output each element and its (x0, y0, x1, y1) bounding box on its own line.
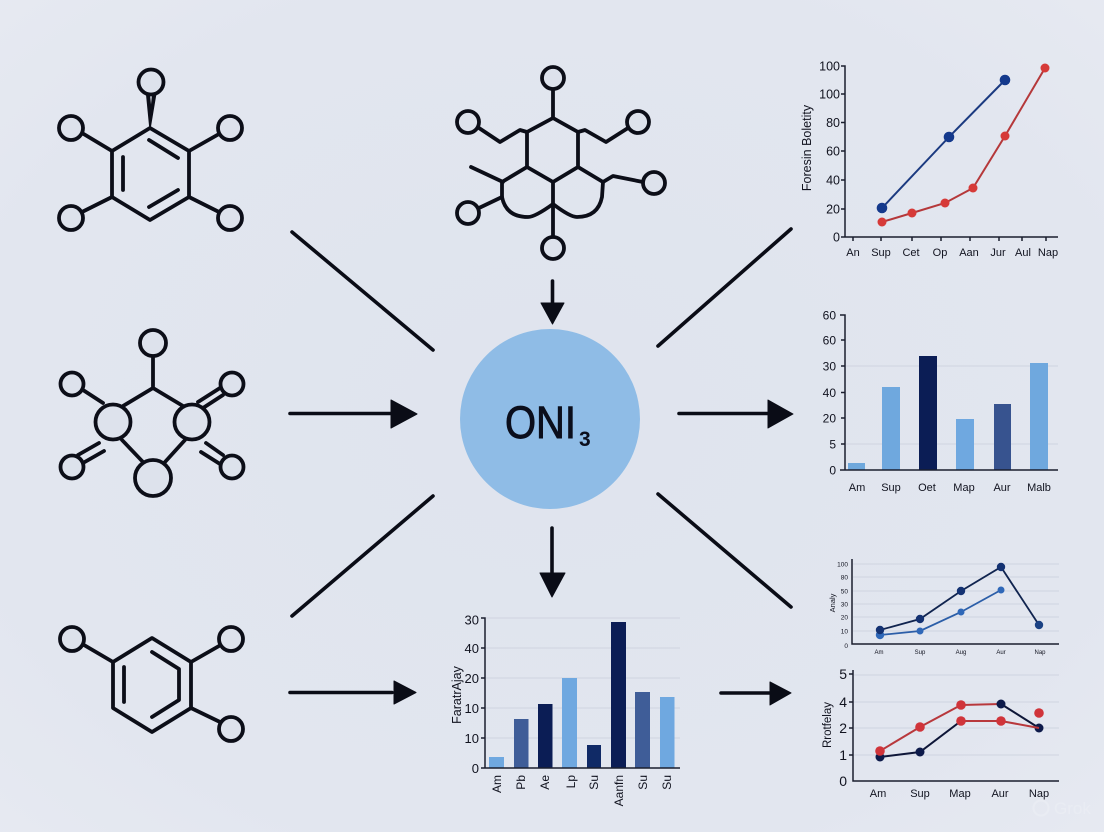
light blue series (876, 586, 1004, 639)
y axis labels: 40 (823, 386, 836, 400)
y axis labels: 40 (465, 641, 479, 656)
y axis labels: 30 (465, 612, 479, 628)
red series (878, 64, 1050, 226)
y axis labels: 50 (841, 588, 848, 596)
y axis labels: 10 (465, 701, 479, 716)
y axis labels: 20 (823, 412, 836, 426)
x axis labels: Am (874, 650, 884, 656)
y axis title: Foresin Boletity (800, 104, 814, 191)
bars (848, 356, 1048, 470)
line: upper left diagonal (292, 232, 433, 350)
x axis labels: Cet (902, 247, 920, 259)
x axis labels (874, 650, 1046, 656)
y axis labels: 30 (823, 360, 836, 374)
watermark (1034, 799, 1091, 818)
x axis labels (870, 788, 1049, 800)
x axis labels: Op (933, 247, 947, 259)
line chart: lower right upper panel (828, 559, 1059, 656)
arrow: bar chart to lower right charts (721, 682, 791, 705)
bar chart: middle right (823, 308, 1058, 494)
central label: 3 (579, 428, 591, 451)
x axis labels: Nap (1038, 247, 1058, 259)
x axis labels: Lp (564, 775, 578, 788)
x axis labels: Su (587, 775, 601, 790)
x axis labels: Aanfn (612, 775, 626, 806)
y axis labels (837, 562, 848, 650)
y axis labels: 40 (826, 174, 840, 188)
x axis labels (849, 482, 1051, 494)
x axis labels: Aan (959, 247, 979, 259)
y axis labels: 4 (839, 694, 847, 710)
arrow: centre down to bar chart (540, 528, 565, 597)
central circle node (460, 329, 640, 509)
x axis labels: Sup (881, 482, 901, 494)
dark blue series (876, 563, 1043, 634)
x axis labels: Am (849, 482, 865, 494)
x axis labels: Am (870, 788, 886, 800)
y axis labels: 100 (819, 60, 840, 74)
y axis labels: 0 (844, 643, 848, 650)
y axis labels: 100 (819, 88, 840, 102)
molecule: top centre, fused rings (457, 67, 665, 259)
y axis labels: 80 (841, 574, 848, 582)
y axis labels: 20 (465, 671, 479, 686)
x axis labels: Map (949, 788, 971, 800)
x axis labels: Sup (910, 788, 930, 800)
x axis labels: Su (660, 775, 674, 790)
bar chart: bottom centre (450, 612, 680, 806)
y axis title: FaratrAjay (450, 665, 464, 724)
y axis title: Analy (828, 593, 837, 612)
y axis labels: 20 (841, 614, 848, 622)
y axis labels: 5 (839, 666, 847, 682)
x axis labels: Map (953, 482, 975, 494)
blue series (877, 75, 1010, 213)
molecule: top left, six-ring with five substituents (59, 70, 242, 230)
y axis labels: 60 (823, 334, 836, 348)
x axis labels: Nap (1029, 788, 1049, 800)
y axis labels: 10 (465, 731, 479, 746)
arrow: centre to right bar chart (679, 400, 793, 428)
x axis labels: Malb (1027, 482, 1051, 494)
line: lower left diagonal (292, 496, 433, 616)
y axis labels (465, 612, 479, 776)
x axis labels: Nap (1034, 650, 1046, 656)
y axis labels: 1 (839, 747, 847, 763)
y axis labels: 0 (833, 230, 840, 244)
y axis labels: 5 (829, 438, 836, 452)
y axis labels (823, 308, 836, 478)
x axis labels: Sup (871, 247, 891, 259)
arrow: middle left to centre (290, 400, 417, 428)
x axis labels: Aul (1015, 247, 1031, 259)
x axis labels (846, 247, 1058, 259)
dark series (876, 704, 1044, 762)
line: upper right diagonal (658, 229, 791, 346)
y axis labels: 0 (839, 773, 847, 789)
line: lower right diagonal (658, 494, 791, 607)
molecule: middle left, circles linked by bonds (60, 330, 244, 496)
y axis labels: 80 (826, 116, 840, 130)
x axis labels: Aur (991, 788, 1009, 800)
x axis labels: Sup (915, 650, 926, 656)
x axis labels: Su (636, 775, 650, 790)
x axis labels: An (846, 247, 860, 259)
y axis labels: 0 (472, 761, 479, 776)
molecule: bottom left, benzene ring with three substituents (60, 627, 243, 741)
x axis labels: Aur (993, 482, 1011, 494)
line chart: lower right lower panel (822, 666, 1059, 800)
y axis title: Rrotfelay (822, 702, 834, 748)
red series (875, 700, 1044, 756)
x axis labels: Pb (514, 775, 528, 790)
x axis labels (490, 775, 674, 806)
y axis labels (839, 666, 847, 789)
x axis labels: Oet (918, 482, 936, 494)
y axis labels: 100 (837, 562, 848, 568)
x axis labels: Ae (538, 775, 552, 790)
central label: ONI (505, 397, 576, 448)
watermark: Grok (1054, 799, 1091, 818)
line chart: top right (800, 60, 1058, 259)
x axis labels: Jur (990, 247, 1006, 259)
y axis labels: 0 (829, 464, 836, 478)
y axis labels (819, 60, 840, 244)
y axis labels: 60 (826, 144, 840, 158)
y axis labels: 20 (826, 202, 840, 216)
y axis labels: 10 (841, 628, 848, 636)
x axis labels: Aur (996, 650, 1006, 656)
bars (489, 622, 674, 768)
y axis labels: 60 (823, 308, 836, 322)
x axis labels: Aug (956, 650, 966, 656)
y axis labels: 2 (839, 720, 847, 736)
arrow: bottom left to bar chart (290, 681, 416, 704)
x axis labels: Am (490, 775, 504, 793)
y axis labels: 30 (841, 602, 848, 608)
arrow: top molecule down to centre (541, 281, 564, 324)
